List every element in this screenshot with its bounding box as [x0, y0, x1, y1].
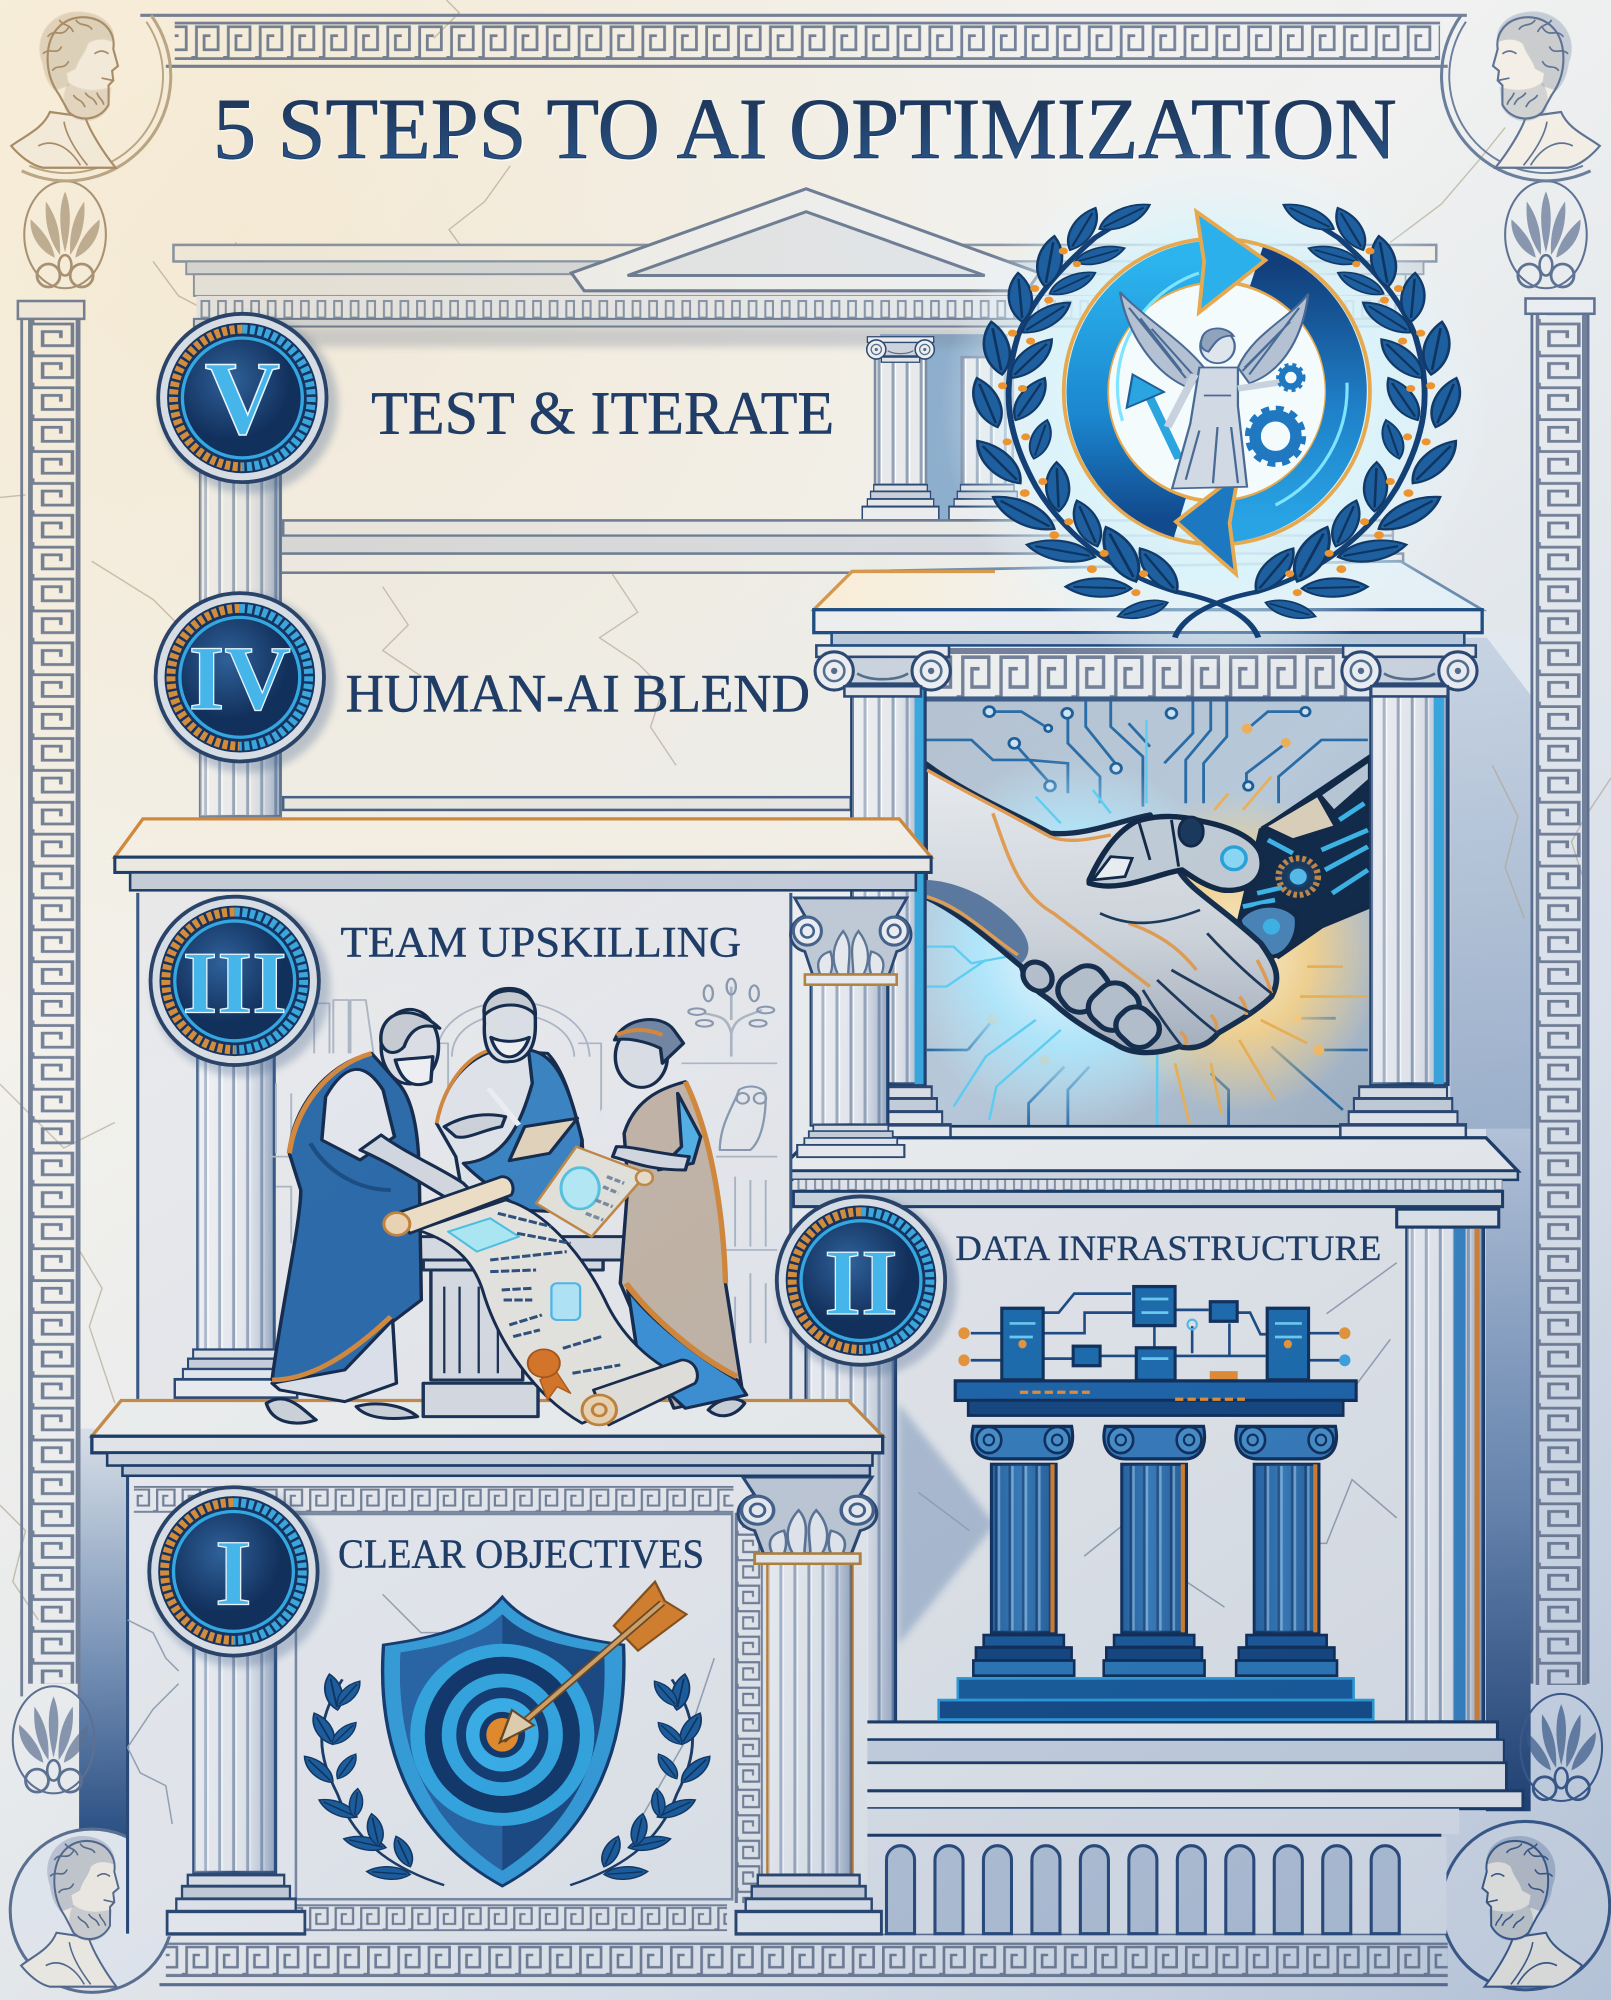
frieze	[925, 648, 1371, 698]
scroll upper sheet	[536, 1147, 653, 1237]
scholar: woman	[586, 1020, 747, 1416]
right column	[736, 1477, 881, 1934]
scholar: middle	[437, 988, 586, 1213]
pediment	[571, 189, 1040, 291]
pillar	[1236, 1426, 1337, 1676]
right ionic column	[1340, 645, 1477, 1148]
heading: test and iterate: TEST & ITERATE	[371, 380, 834, 448]
palmette: lower left	[13, 1686, 94, 1793]
panel: step IV wall	[283, 574, 857, 810]
stylobate	[939, 1678, 1373, 1720]
left column	[175, 1046, 297, 1398]
shield	[383, 1597, 624, 1886]
temple: step V	[173, 189, 1436, 816]
right column	[1397, 1209, 1499, 1722]
pillar	[1104, 1426, 1205, 1676]
steps	[847, 1722, 1523, 1835]
bust: top left	[11, 12, 171, 181]
medallion: III	[151, 897, 330, 1077]
pedestal	[391, 1237, 624, 1417]
lower cornice	[242, 520, 1403, 573]
laurel branches	[966, 198, 1468, 638]
medallion: II: II	[824, 1231, 898, 1335]
panel: step III wall	[115, 819, 931, 1403]
left column	[167, 1645, 305, 1934]
top slab	[814, 561, 1482, 645]
title: 5 STEPS TO AI OPTIMIZATION	[215, 83, 1399, 179]
bust: top right	[1442, 12, 1600, 181]
medallion: I: I	[215, 1522, 252, 1626]
scroll rolls	[384, 1177, 697, 1425]
gears	[1249, 365, 1304, 463]
right corinthian column	[790, 898, 911, 1157]
human hand	[925, 763, 1277, 1054]
robot hand	[1089, 817, 1262, 890]
illustration: shield and target	[299, 1582, 716, 1886]
circuit traces	[925, 700, 1368, 1127]
panel: step I wall	[92, 1401, 883, 1936]
arrow	[500, 1582, 686, 1742]
tree and owl	[688, 979, 774, 1150]
bust: bottom right	[1441, 1821, 1610, 1990]
laurel: right	[570, 1673, 716, 1885]
left column	[806, 1327, 895, 1735]
winged victory figure	[1120, 292, 1308, 488]
temple: step II	[778, 1138, 1523, 1934]
emblem: laurel wreath with cycle and winged figure	[966, 198, 1468, 638]
medallion: III: III	[183, 934, 287, 1033]
medallion: IV	[156, 593, 335, 773]
cycle ring	[1064, 212, 1370, 574]
wreath glow	[941, 147, 1490, 670]
slab	[115, 819, 931, 890]
illustration: data pillars	[939, 1287, 1373, 1720]
palmette: upper left	[24, 181, 106, 288]
illustration: scholars with scroll	[266, 979, 777, 1425]
palmette: upper right	[1505, 181, 1587, 288]
pillar	[972, 1426, 1074, 1676]
columns behind wreath	[862, 337, 1026, 520]
robot arm	[1239, 757, 1370, 957]
lightning	[927, 720, 1157, 1127]
arcade	[847, 1837, 1446, 1934]
title: 5 STEPS TO AI OPTIMIZATION	[213, 81, 1397, 177]
medallion: I	[149, 1487, 329, 1667]
laurel: left	[299, 1673, 444, 1885]
medallion: IV: IV	[189, 627, 291, 729]
bust: bottom left	[10, 1829, 173, 1992]
library backdrop	[268, 987, 777, 1343]
slab	[92, 1401, 883, 1476]
heading: data infrastructure: DATA INFRASTRUCTURE	[955, 1228, 1381, 1268]
column under V	[200, 472, 281, 816]
heading: team upskilling: TEAM UPSKILLING	[341, 919, 741, 967]
scholar: left	[266, 1009, 490, 1423]
heading: human-ai blend: HUMAN-AI BLEND	[346, 664, 810, 724]
temple: handshake step	[814, 561, 1482, 1148]
medallion: II	[777, 1196, 957, 1376]
medallion: V	[158, 314, 338, 494]
heading: clear objectives: CLEAR OBJECTIVES	[338, 1532, 704, 1577]
handshake scene	[900, 697, 1382, 1130]
medallion: V: V	[205, 341, 280, 457]
scroll main sheet	[417, 1200, 689, 1423]
palmette: lower right	[1520, 1694, 1602, 1801]
platform	[955, 1381, 1356, 1416]
left ionic column	[815, 645, 951, 1148]
slab	[778, 1138, 1518, 1207]
data network	[958, 1287, 1350, 1380]
